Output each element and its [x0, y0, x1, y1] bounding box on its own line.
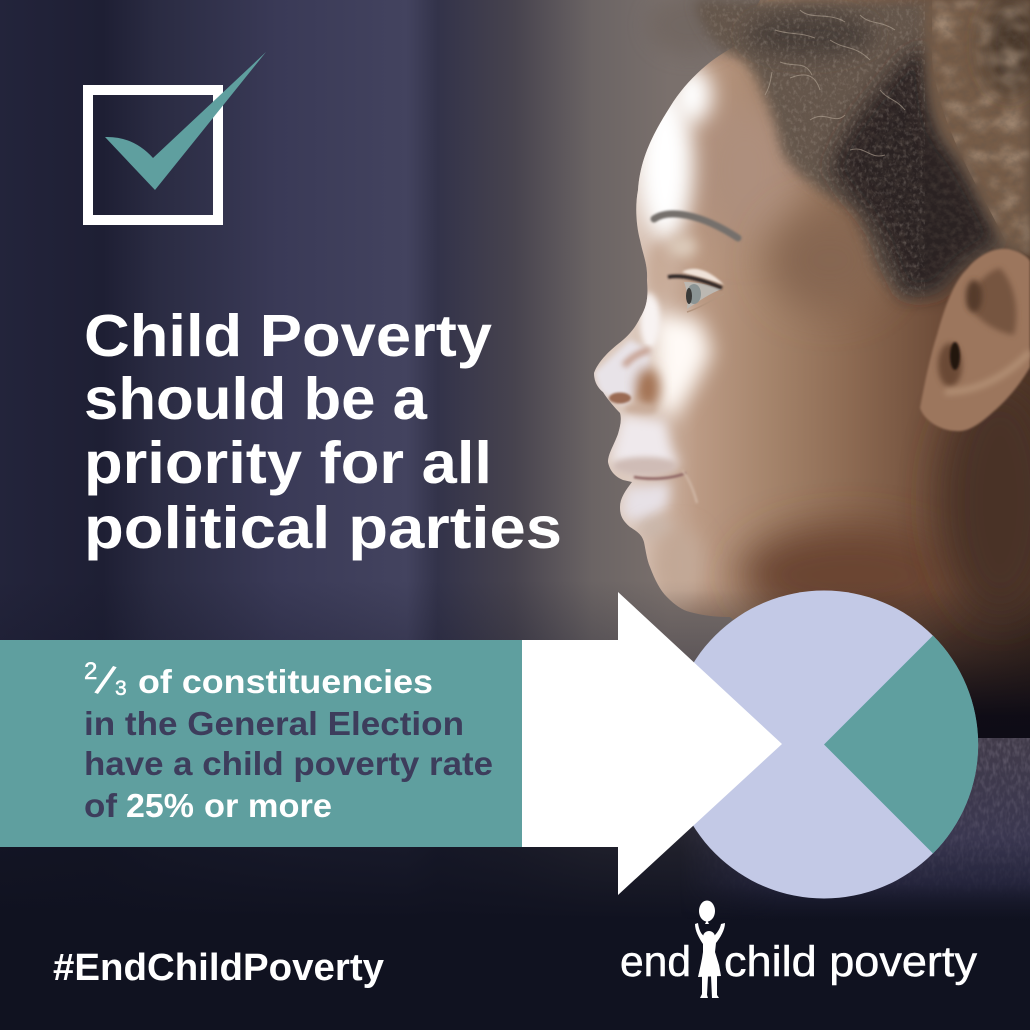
statistic text: in the General Election: [84, 705, 464, 742]
statistic text: or more: [204, 787, 332, 824]
smile crease: [682, 470, 697, 503]
two thirds fraction: 2: [84, 658, 97, 685]
nose bridge highlight: [640, 292, 660, 348]
light on brow top: [672, 67, 712, 123]
ear: [920, 249, 1030, 431]
statistic text: have a child poverty rate: [84, 745, 493, 782]
two thirds fraction: [84, 656, 127, 705]
hashtag: #EndChildPoverty: [53, 947, 384, 989]
sweater: [700, 738, 1030, 900]
two thirds fraction: /: [92, 656, 119, 705]
logo wordmark: child poverty: [724, 938, 978, 986]
upper lid highlight: [669, 237, 697, 257]
nose side shadow: [636, 368, 660, 408]
title: Child Poverty: [84, 303, 492, 369]
logo wordmark: end: [620, 938, 691, 986]
icon: child with balloon: [695, 900, 725, 998]
statistic text: of constituencies: [138, 663, 433, 700]
upper lip: [610, 416, 680, 470]
lower jaw light: [652, 537, 708, 592]
hair fly-away highlights: [700, 0, 925, 300]
light on nose and cheek: [652, 312, 712, 420]
title: should be a: [84, 366, 428, 432]
hair: [648, 0, 1030, 300]
lower lip and chin: [622, 482, 670, 525]
checkbox square: [88, 90, 218, 220]
panel: statistic band: [0, 640, 522, 847]
statistic text: [84, 656, 493, 824]
statistic text: 25%: [126, 787, 194, 824]
bun blotches: [932, 0, 1030, 257]
mouth line: [634, 473, 686, 479]
ear canal: [950, 342, 960, 370]
photo: child in profile: [590, 0, 1030, 770]
nose tip tone: [594, 340, 650, 405]
hair fine texture: [843, 6, 1022, 288]
warm forehead tone: [710, 111, 806, 228]
logo wordmark: [620, 938, 978, 986]
under nose shade: [624, 404, 656, 416]
knit texture: [933, 738, 1030, 868]
eye socket tone: [646, 242, 665, 300]
chin: [636, 511, 658, 532]
two thirds fraction: 3: [115, 677, 127, 700]
hair mass: [695, 0, 1030, 300]
statistic text: of: [84, 787, 118, 824]
face and neck: [590, 0, 1030, 770]
temple shadow tone: [760, 208, 846, 308]
bottom dark fade: [0, 580, 1030, 1030]
arrow: [522, 592, 782, 895]
title: [84, 303, 562, 561]
check mark: [105, 52, 266, 190]
title: political parties: [84, 495, 562, 561]
jaw right shadow: [940, 380, 1030, 620]
chart: pie with two thirds lavender: [670, 590, 978, 898]
neck shadow: [668, 597, 1030, 738]
light on forehead: [637, 90, 693, 240]
soft background hair haze: [648, 0, 732, 55]
dark hair band: [830, 47, 1003, 295]
lips tone: [613, 457, 677, 475]
eyebrow: [654, 214, 738, 238]
jaw warm shadow: [740, 525, 960, 625]
ear shadow patch: [966, 280, 982, 312]
hair crown shadow: [745, 13, 875, 57]
bun top dark patch: [982, 0, 1030, 95]
individual strands: [765, 10, 905, 156]
pie teal share: [824, 636, 978, 854]
brown bun: [925, 0, 1030, 257]
pie lavender share: [670, 590, 978, 898]
logo: end child poverty: [620, 900, 978, 998]
icon: ballot checkbox: [88, 52, 266, 220]
title: priority for all: [84, 430, 492, 496]
nostril: [609, 392, 631, 404]
eye: [668, 269, 724, 312]
ear inner fold: [968, 268, 1016, 335]
ear concha shade: [938, 343, 962, 387]
nose wing stripe: [624, 350, 650, 366]
ear lobe lit: [945, 352, 1030, 392]
